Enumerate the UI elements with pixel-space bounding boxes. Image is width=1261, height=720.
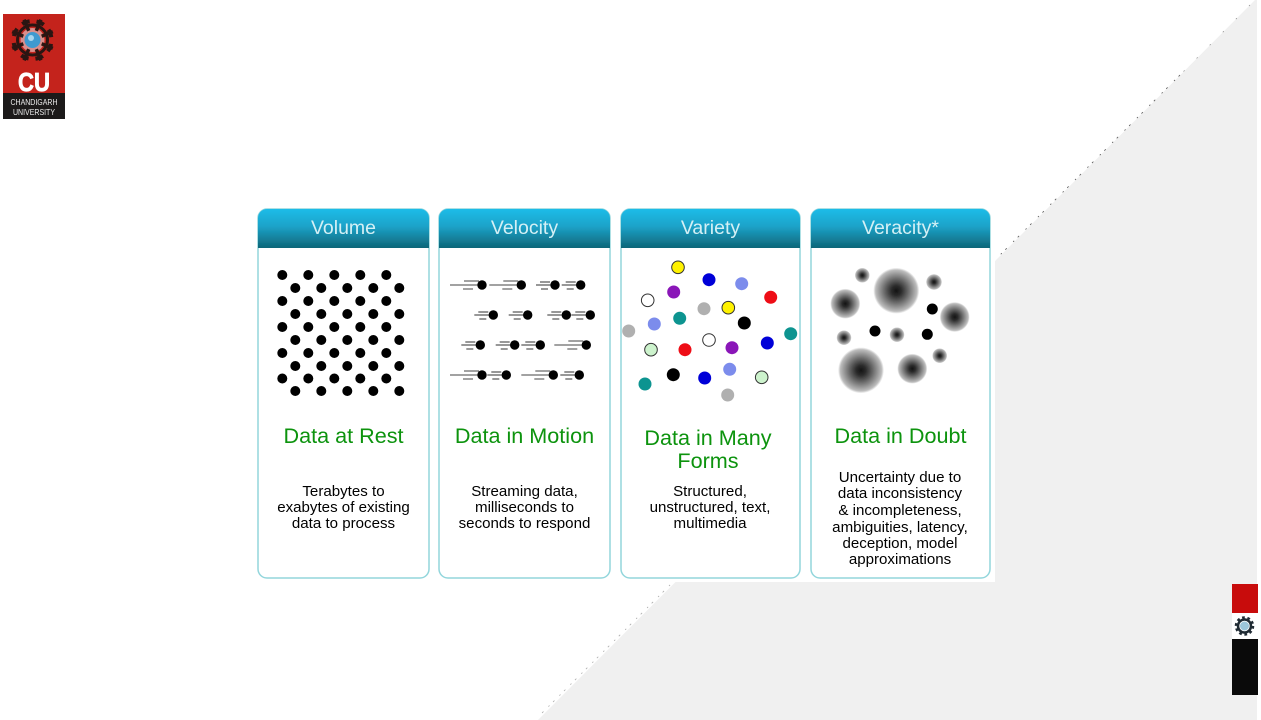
background diagonal panel xyxy=(538,0,1257,720)
description: Veracity: data inconsistency xyxy=(838,485,963,502)
description: Veracity: & incompleteness, xyxy=(838,502,962,519)
dotted diagonal edge xyxy=(540,5,1250,715)
panel: Veracity xyxy=(811,209,990,578)
Velocity header xyxy=(439,209,610,248)
description: Veracity: approximations xyxy=(849,551,951,568)
coloured dots: data in many forms xyxy=(622,261,797,402)
heading: Data in Many Forms: Forms xyxy=(677,448,739,473)
panel: Velocity xyxy=(439,209,610,578)
white backing of the four-card figure xyxy=(253,205,995,582)
description: Variety: unstructured, text, xyxy=(650,499,770,516)
Volume header xyxy=(258,209,429,248)
logo: Chandigarh University: UNIVERSITY xyxy=(13,107,55,117)
description: Variety: multimedia xyxy=(674,515,747,532)
panel: Volume xyxy=(258,209,429,578)
Variety header: Variety xyxy=(681,217,740,239)
description: Veracity: ambiguities, latency, xyxy=(832,519,968,536)
dot grid: data at rest xyxy=(277,270,404,396)
side brand bar xyxy=(1232,584,1258,695)
Variety header xyxy=(621,209,800,248)
description: Variety: Structured, xyxy=(673,483,747,500)
heading: Data in Doubt: Data in Doubt xyxy=(834,423,967,448)
Velocity header: Velocity xyxy=(491,217,558,239)
description: Veracity: deception, model xyxy=(843,535,957,552)
logo: Chandigarh University: CHANDIGARH xyxy=(10,97,58,107)
heading: Data in Motion: Data in Motion xyxy=(455,423,594,448)
description: Volume: Terabytes to xyxy=(302,483,385,500)
description: Volume: data to process xyxy=(292,515,395,532)
description: Velocity: seconds to respond xyxy=(459,515,590,532)
panel: Variety xyxy=(621,209,800,578)
heading: Data at Rest: Data at Rest xyxy=(283,423,404,448)
description: Veracity: Uncertainty due to xyxy=(839,469,961,486)
logo: Chandigarh University: CU xyxy=(18,67,50,97)
description: Velocity: milliseconds to xyxy=(475,499,574,516)
moving dots: data in motion xyxy=(450,280,595,380)
heading: Data in Many Forms: Data in Many xyxy=(644,425,772,450)
description: Velocity: Streaming data, xyxy=(471,483,578,500)
description: Volume: exabytes of existing xyxy=(277,499,410,516)
Veracity header: Veracity* xyxy=(862,217,939,239)
logo: Chandigarh University xyxy=(3,14,65,119)
Volume header: Volume xyxy=(311,217,376,239)
fuzzy dots: data in doubt xyxy=(830,268,970,393)
Veracity header xyxy=(811,209,990,248)
